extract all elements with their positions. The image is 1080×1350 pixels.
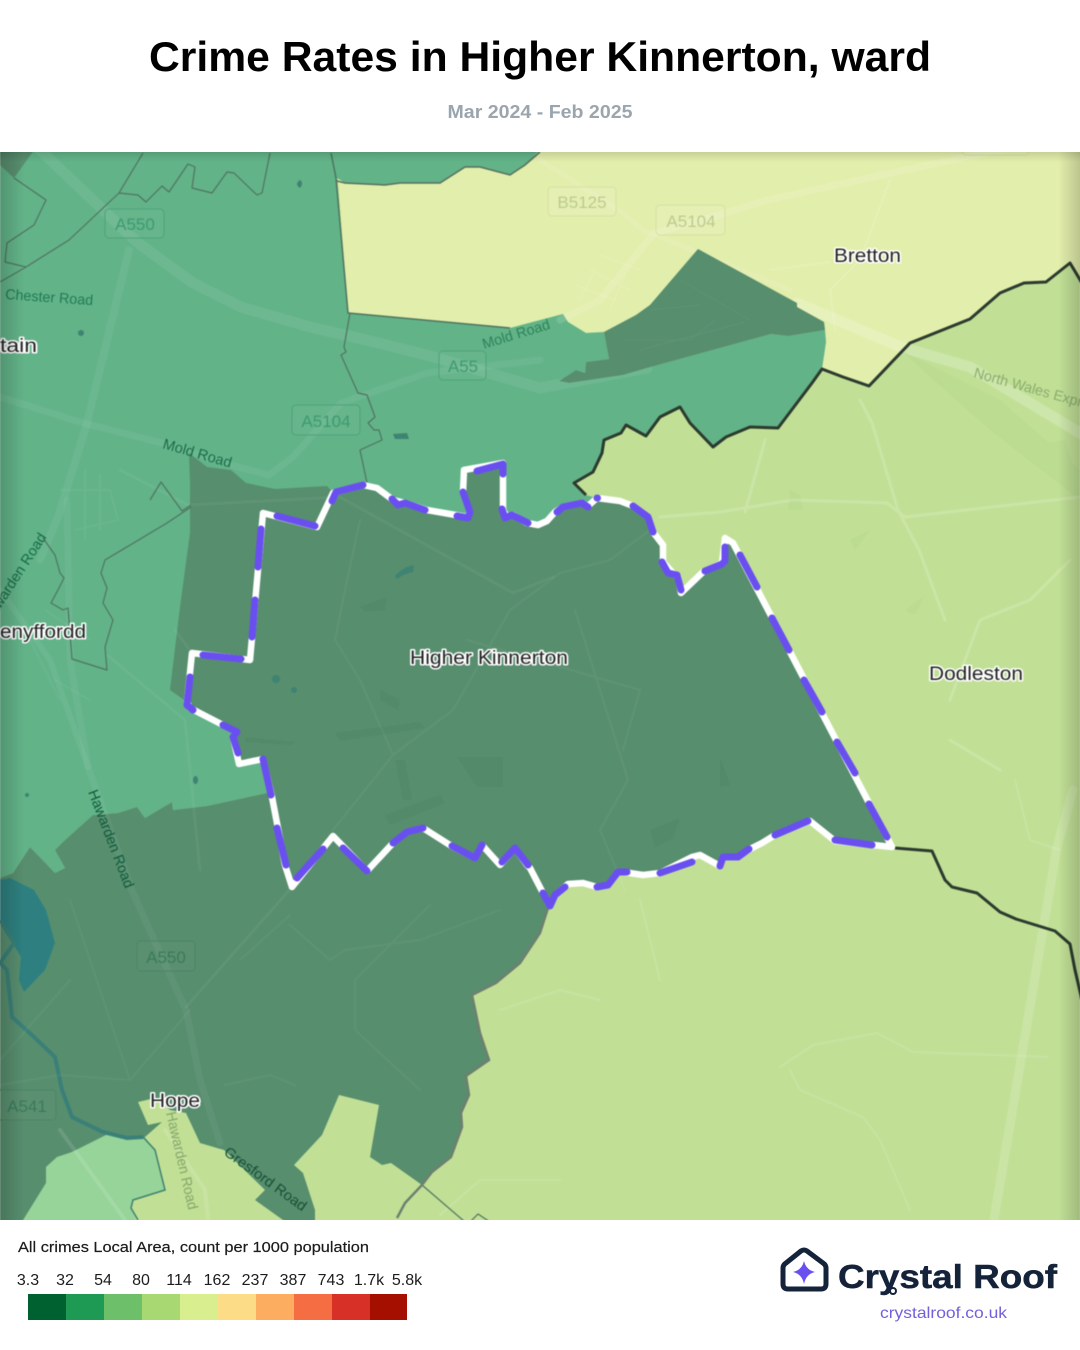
badge A550 south: A550	[146, 948, 186, 967]
Hawarden Road south: Hawarden Road	[162, 1110, 200, 1211]
subtitle: date range: Mar 2024 - Feb 2025	[448, 102, 632, 122]
badge A541	[0, 1090, 56, 1120]
yellow edge shadow	[337, 152, 540, 185]
label: Hope: Hope	[150, 1091, 200, 1112]
expressway south east	[993, 790, 1073, 1225]
label: tain: tain	[0, 336, 37, 357]
badge A541: A541	[7, 1097, 47, 1116]
Penyffordd link	[10, 601, 84, 760]
legend tick labels: 5.8k	[392, 1272, 423, 1289]
ponds	[25, 180, 414, 797]
A550 north	[40, 250, 129, 560]
south west lanes	[0, 900, 500, 1090]
river	[0, 920, 143, 1138]
south east lanes	[440, 780, 1060, 1215]
legend tick labels: 743	[318, 1272, 344, 1289]
map region: dark green north patch	[559, 249, 825, 383]
vignette right	[1058, 152, 1080, 1220]
water: reservoir and river	[0, 180, 414, 1220]
badge A5104 west: A5104	[301, 412, 351, 431]
label: Bretton: Bretton	[834, 246, 901, 267]
woodland patches	[245, 597, 730, 847]
ward outline: purple dashes	[187, 464, 887, 906]
badge A55: A55	[448, 357, 478, 376]
Bretton lanes	[770, 180, 890, 330]
vignette left	[0, 152, 24, 1220]
label: Dodleston: Dodleston	[929, 664, 1023, 685]
minor roads over regions	[0, 400, 1080, 1225]
label: Higher Kinnerton: Higher Kinnerton	[410, 648, 568, 669]
badge A550 south	[137, 941, 195, 971]
minor road into ward	[107, 470, 553, 1007]
road badges	[0, 140, 1029, 1120]
village roads	[333, 520, 650, 890]
A5104	[560, 150, 1000, 320]
badge A5104 east: A5104	[666, 212, 716, 231]
ward outline: white line	[187, 463, 892, 906]
badge A5104 west	[292, 405, 360, 435]
A550 south	[67, 500, 220, 1143]
legend tick labels: 80	[132, 1272, 150, 1289]
brand url: crystalroof.co.uk	[880, 1305, 1008, 1322]
legend tick labels: 162	[204, 1272, 230, 1289]
east lanes	[660, 400, 1080, 770]
legend tick labels: 387	[280, 1272, 306, 1289]
legend colour scale	[28, 1294, 407, 1320]
map region: dark green corner	[0, 150, 34, 178]
B5125	[540, 160, 790, 290]
boundary north edge	[331, 153, 510, 328]
label: enyffordd: enyffordd	[0, 622, 86, 643]
river thin edge	[131, 1137, 165, 1220]
badge A55	[439, 351, 486, 380]
title: Crime Rates in Higher Kinnerton, ward	[149, 33, 931, 80]
map region: pale green south west	[20, 1133, 165, 1225]
boundary north west	[0, 153, 270, 282]
yellow estate streets	[575, 255, 640, 310]
icon: house with star	[783, 1250, 826, 1289]
county boundary north	[574, 263, 1080, 495]
map region: dark green ward and south west	[0, 453, 892, 1225]
legend tick labels: 237	[242, 1272, 268, 1289]
legend tick labels: 54	[94, 1272, 112, 1289]
Mold Road north: Mold Road	[480, 317, 552, 353]
legend tick labels: 114	[166, 1272, 192, 1289]
badge A550 north: A550	[115, 215, 155, 234]
badge top right	[962, 140, 1029, 155]
dark patch streets	[625, 280, 750, 350]
place labels	[0, 246, 1023, 1112]
road labels	[0, 287, 1080, 1215]
boundary south east corner	[422, 1185, 490, 1222]
vignette top	[0, 152, 1080, 162]
boundary Penyffordd	[43, 482, 191, 670]
legend tick labels: 32	[56, 1272, 74, 1289]
brand name: Crystal Roof	[838, 1258, 1058, 1295]
boundary central	[341, 313, 382, 483]
badge B5125: B5125	[557, 193, 607, 212]
map region: yellow north east	[336, 150, 1080, 386]
key ring on brand name	[890, 1288, 896, 1294]
Mold estate streets	[30, 470, 118, 700]
ward boundary lines	[0, 153, 510, 1222]
reservoir	[0, 878, 55, 992]
edge vignette	[0, 152, 1080, 1220]
badge A550 north	[105, 209, 164, 238]
brand logo	[783, 1250, 1058, 1322]
legend title: All crimes Local Area, count per 1000 population	[18, 1239, 369, 1256]
legend tick labels: 1.7k	[354, 1272, 385, 1289]
Mold Road west: Mold Road	[161, 436, 234, 471]
major roads under regions	[0, 150, 1080, 767]
dark region east edge	[397, 908, 548, 1218]
Gresford Road: Gresford Road	[221, 1144, 309, 1215]
badge A5104 east	[656, 205, 725, 235]
legend tick labels: 3.3	[17, 1272, 39, 1289]
county boundary east	[895, 848, 1080, 1000]
motorway A55 east	[797, 303, 1080, 436]
Hope road	[60, 1130, 208, 1220]
Mold Road	[0, 360, 540, 475]
legend	[17, 1239, 423, 1320]
map region: light green base	[96, 178, 1080, 1220]
badge B5125	[548, 187, 616, 216]
legend tick labels	[17, 1272, 423, 1289]
woodland patches in pale areas	[904, 352, 906, 354]
Chester Road: Chester Road	[5, 287, 94, 309]
motorway A55 west	[40, 150, 647, 388]
map region: mid green west	[0, 150, 826, 878]
Hawarden Road centre: Hawarden Road	[84, 788, 136, 891]
